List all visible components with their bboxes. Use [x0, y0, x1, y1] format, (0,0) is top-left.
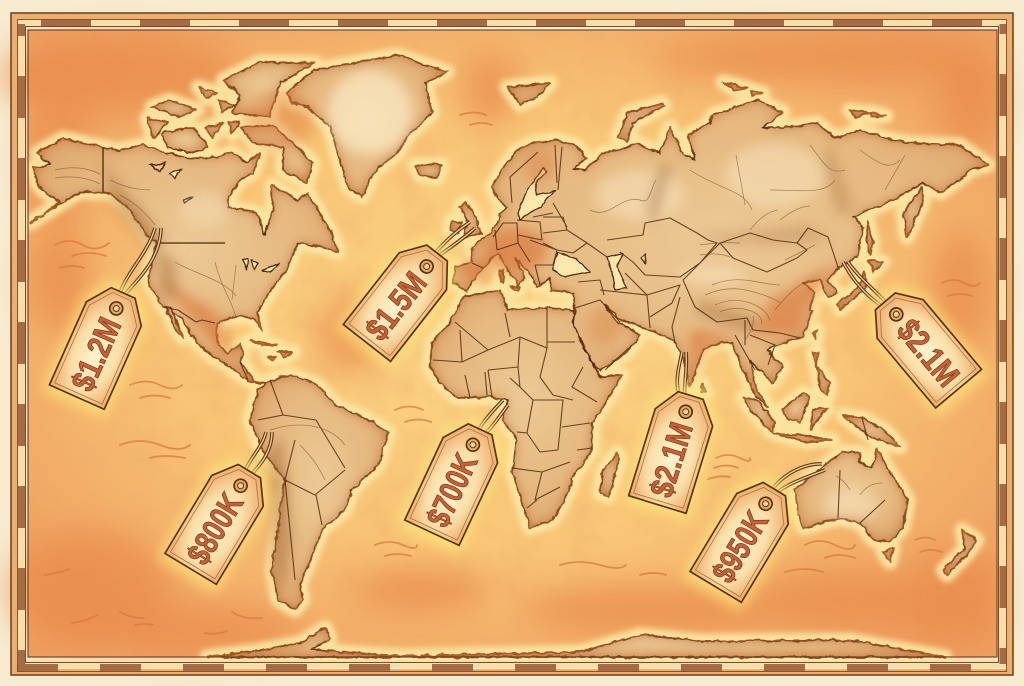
Madagascar — [600, 453, 620, 497]
Kamchatka — [903, 187, 923, 237]
price tag: $2.1M Japan — [843, 262, 990, 417]
Iceland — [415, 165, 442, 178]
land colour washes — [100, 70, 878, 595]
price tag: $700K: $700K — [419, 448, 485, 532]
Greenland — [287, 55, 447, 197]
New Zealand — [943, 530, 977, 575]
Caribbean islands — [250, 340, 293, 360]
price tag: $1.5M: $1.5M — [358, 265, 434, 347]
Mediterranean islands — [500, 270, 520, 291]
ocean wave strokes — [45, 112, 980, 634]
price tag: $950K: $950K — [704, 504, 775, 589]
continent: North America — [30, 138, 338, 384]
Baja California — [165, 306, 183, 338]
price tag: $2.1M India: $2.1M — [642, 418, 700, 501]
country borders and rivers — [55, 145, 905, 580]
Sakhalin and Japan — [838, 222, 883, 310]
price tag: $1.2M: $1.2M — [64, 312, 128, 396]
Eurasia — [453, 100, 988, 407]
price tag: $950K — [682, 464, 825, 611]
price tag: $800K — [157, 432, 283, 593]
price tag: $700K — [398, 400, 514, 554]
Tasmania — [883, 548, 893, 562]
Southeast Asian islands — [701, 330, 900, 447]
price tag: $800K: $800K — [179, 486, 250, 571]
Africa — [430, 290, 622, 528]
Britain and Ireland — [450, 202, 482, 237]
US-Canada border — [103, 147, 225, 243]
price tag: $1.5M — [335, 222, 475, 370]
Australia — [795, 448, 908, 542]
price tag: $2.1M India — [622, 352, 726, 522]
price tag: $2.1M Japan: $2.1M — [890, 312, 967, 394]
South America — [250, 375, 388, 610]
Antarctica — [207, 628, 945, 657]
arctic islands — [147, 62, 315, 183]
price tag: $1.2M — [42, 228, 161, 418]
inland seas and lakes — [170, 168, 646, 290]
Arctic Russian islands — [507, 82, 886, 142]
